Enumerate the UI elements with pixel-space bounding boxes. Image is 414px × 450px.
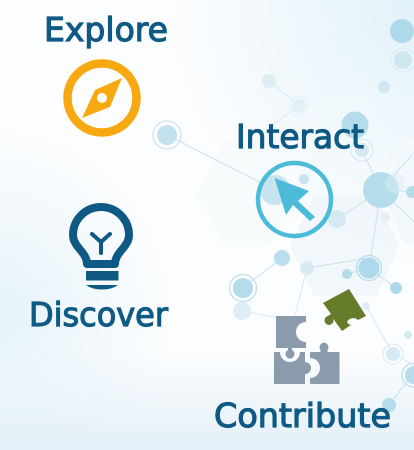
heading: Contribute: Contribute (214, 396, 391, 435)
heading: Interact: Interact (236, 117, 364, 156)
network nodes (153, 19, 414, 412)
puzzle piece: top left (276, 316, 306, 348)
icon: light bulb (73, 207, 129, 290)
icon: compass (68, 64, 136, 132)
puzzle piece: bottom left (274, 352, 311, 384)
heading: Explore: Explore (44, 10, 168, 49)
puzzle tab: top piece connector (285, 347, 294, 359)
icon: cursor in circle (258, 163, 331, 236)
hexagon pattern (198, 95, 414, 297)
network lines (167, 60, 414, 405)
icon: puzzle pieces (274, 289, 366, 384)
heading: Discover: Discover (29, 295, 168, 334)
puzzle piece: green (323, 289, 366, 331)
puzzle piece: bottom right (310, 343, 340, 384)
